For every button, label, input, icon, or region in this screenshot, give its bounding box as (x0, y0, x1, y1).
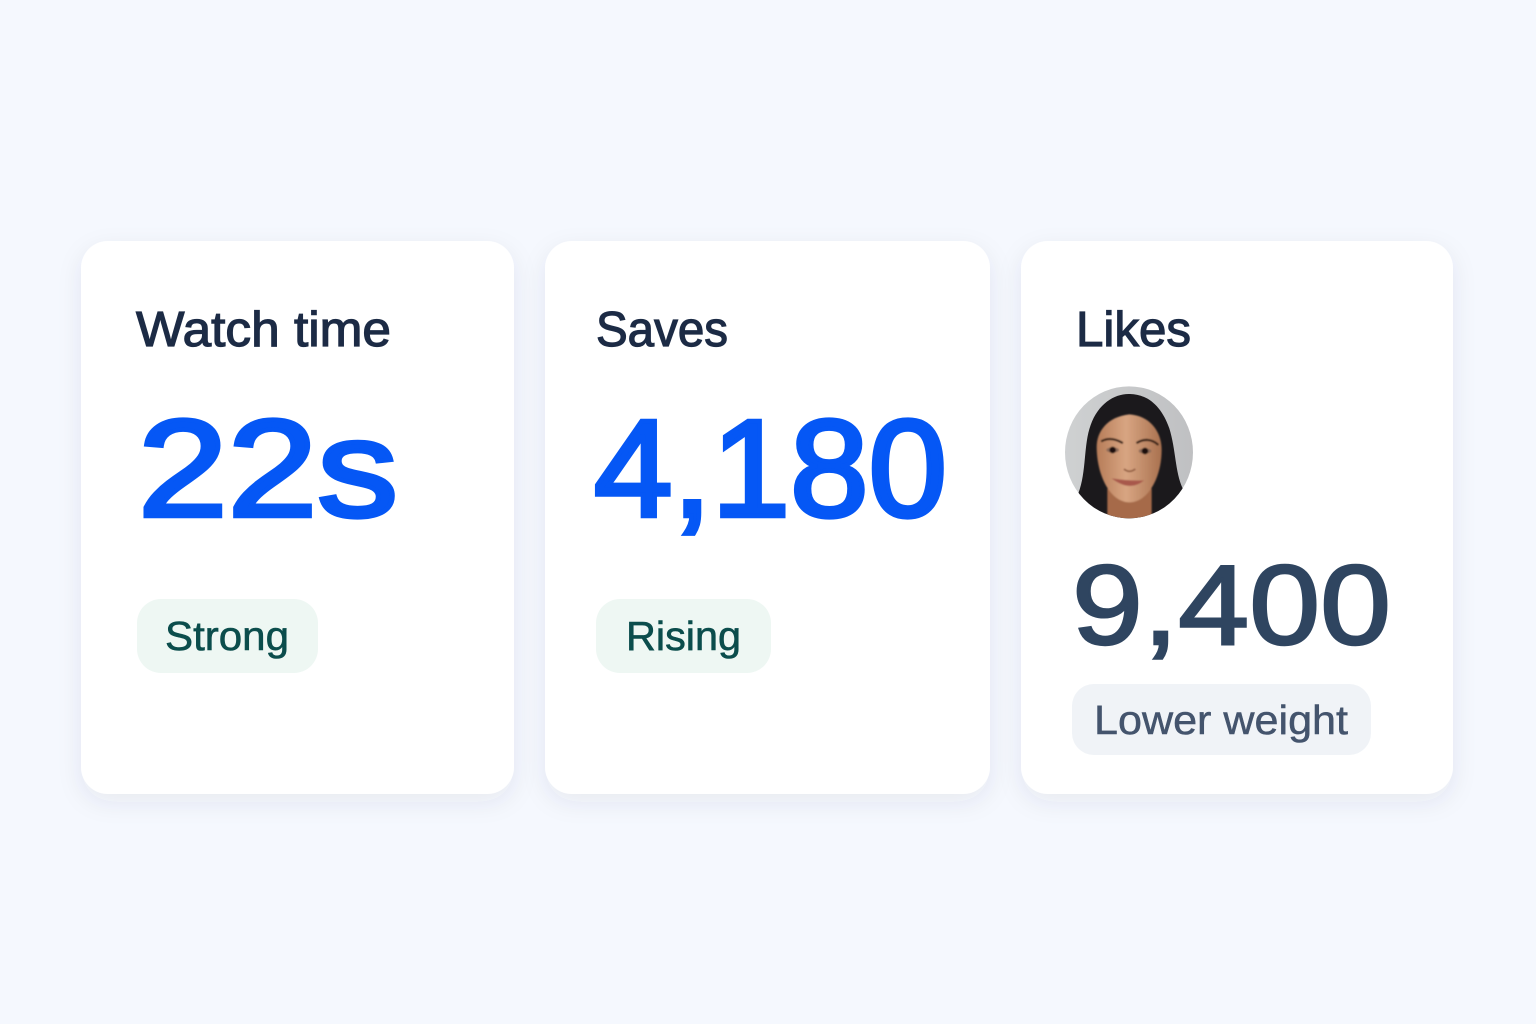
heading: saves: Saves (596, 303, 728, 357)
infographic canvas (79, 241, 1455, 804)
card background (545, 241, 990, 794)
heading: likes: Likes (1076, 303, 1191, 357)
card background (81, 241, 514, 794)
panel: likes (1021, 241, 1453, 794)
panel: watch time (81, 241, 514, 794)
status badge: lower weight (1072, 684, 1371, 755)
card background (1021, 241, 1453, 794)
panel: saves (545, 241, 990, 794)
status badge: rising (596, 599, 771, 673)
metric value: 9,400: 9,400 (1072, 542, 1391, 668)
status badge: rising: Rising (626, 613, 741, 659)
icon: portrait avatar (1063, 385, 1195, 522)
status badge: strong (137, 599, 318, 673)
metric value: 22s: 22s (138, 392, 398, 546)
status badge: lower weight: Lower weight (1094, 697, 1349, 743)
status badge: strong: Strong (165, 613, 289, 659)
metric value: 4,180: 4,180 (594, 392, 947, 546)
heading: watch time: Watch time (136, 303, 391, 357)
